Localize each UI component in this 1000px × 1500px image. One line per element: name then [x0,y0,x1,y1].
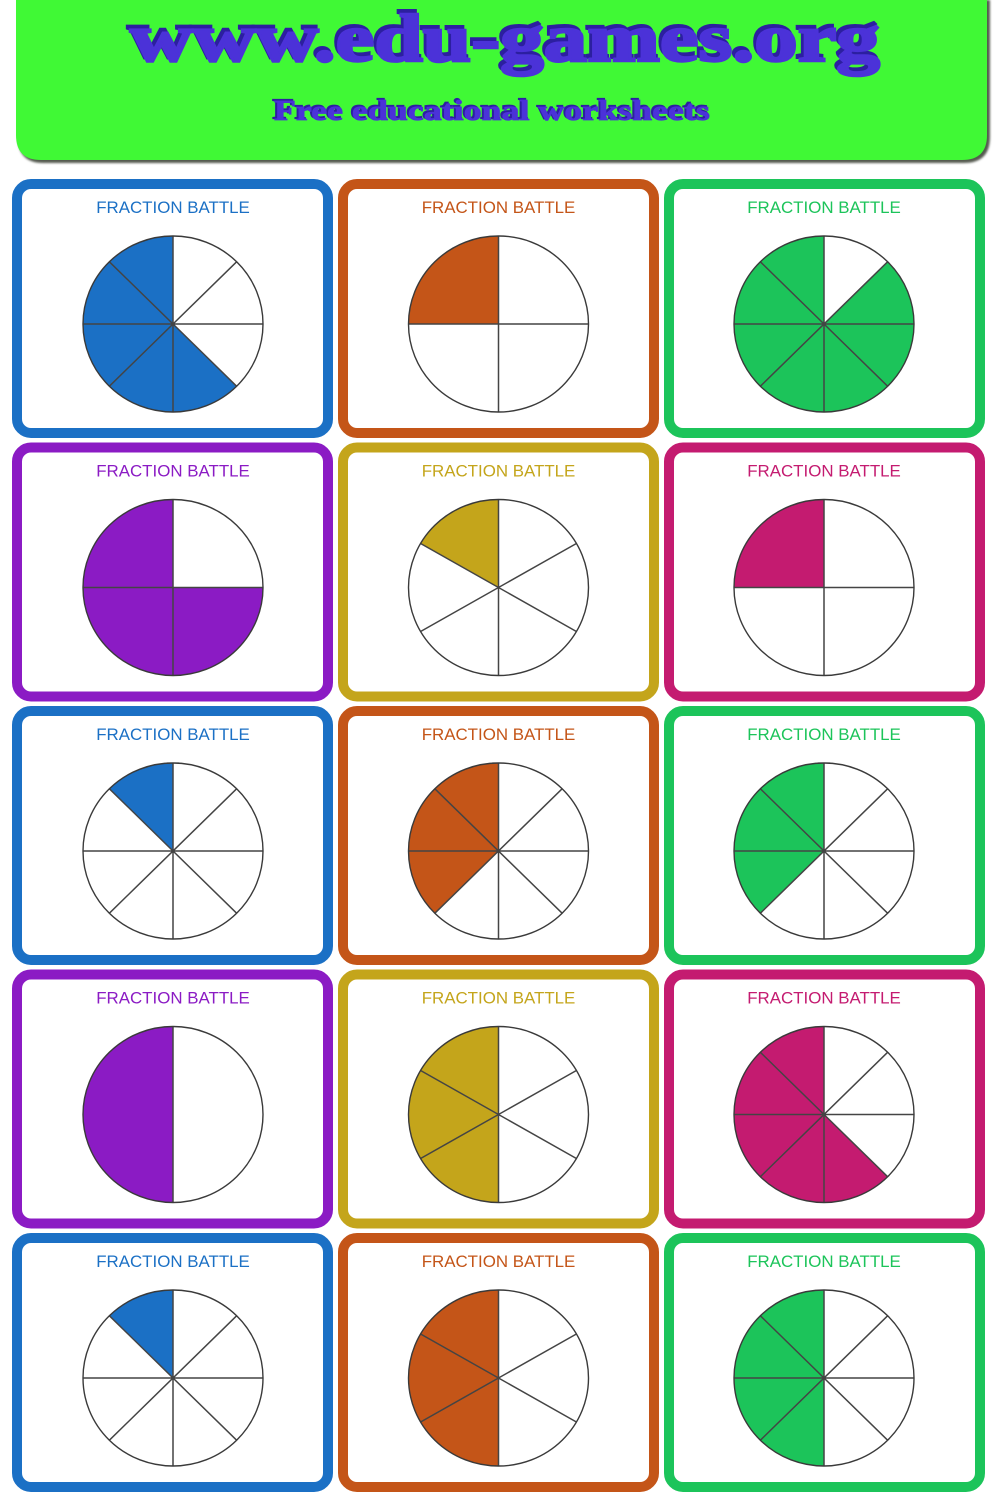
site title: www.edu-games.org [130,0,880,76]
subtitle: Free educational worksheets [272,94,708,125]
card: row 5 col 1, blue 1/8: FRACTION BATTLE [96,1252,250,1271]
pie chart: 5/8 [83,236,263,412]
card: row 4 col 2, gold 3/6: FRACTION BATTLE [422,988,575,1008]
card: row 4 col 3, magenta 5/8 [669,974,980,1224]
card: row 2 col 3, magenta 1/4: FRACTION BATTLE [747,462,901,480]
card: row 2 col 3, magenta 1/4 [669,448,980,696]
card: row 3 col 1, blue 1/8 [17,711,328,960]
pie chart: 1/6 [408,500,588,676]
card: row 2 col 2, gold 1/6: FRACTION BATTLE [422,462,575,480]
pie chart: 3/8 [408,763,588,939]
card: row 3 col 2, orange 3/8 [343,711,654,960]
card: row 2 col 2, gold 1/6 [343,448,654,696]
card: row 5 col 2, orange 3/6: FRACTION BATTLE [422,1252,575,1271]
card: row 1 col 3, green 7/8: FRACTION BATTLE [747,198,901,217]
pie chart: 3/6 [408,1290,588,1466]
pie chart: 4/8 [734,1290,914,1466]
card: row 1 col 3, green 7/8 [669,184,980,433]
pie chart: 3/6 [408,1026,588,1202]
pie chart: 1/8 [83,763,263,939]
pie chart: 3/8 [734,763,914,939]
card: row 4 col 1, purple 1/2 [17,974,328,1224]
card: row 2 col 1, purple 3/4 [17,448,328,696]
card: row 1 col 2, orange 1/4: FRACTION BATTLE [422,198,575,217]
card: row 5 col 2, orange 3/6 [343,1238,654,1487]
pie chart: 3/4 [83,500,263,676]
card: row 3 col 3, green 3/8 [669,711,980,960]
card: row 3 col 3, green 3/8: FRACTION BATTLE [747,725,901,744]
card: row 3 col 1, blue 1/8: FRACTION BATTLE [96,725,250,744]
card: row 4 col 3, magenta 5/8: FRACTION BATTLE [747,988,901,1008]
card: row 2 col 1, purple 3/4: FRACTION BATTLE [96,462,250,480]
pie chart: 1/4 [734,500,914,676]
card: row 5 col 1, blue 1/8 [17,1238,328,1487]
pie chart: 1/2 [83,1026,263,1202]
header banner [16,0,990,163]
card: row 3 col 2, orange 3/8: FRACTION BATTLE [422,725,575,744]
card: row 1 col 1, blue 5/8 [17,184,328,433]
card: row 4 col 2, gold 3/6 [343,974,654,1224]
card: row 1 col 2, orange 1/4 [343,184,654,433]
card: row 1 col 1, blue 5/8: FRACTION BATTLE [96,198,250,217]
pie chart: 1/8 [83,1290,263,1466]
pie chart: 1/4 [408,236,588,412]
card: row 4 col 1, purple 1/2: FRACTION BATTLE [96,988,250,1008]
card: row 5 col 3, green 4/8 [669,1238,980,1487]
pie chart: 7/8 [734,236,914,412]
card: row 5 col 3, green 4/8: FRACTION BATTLE [747,1252,901,1271]
pie chart: 5/8 [734,1026,914,1202]
subtitle: Free educational worksheets [274,96,710,127]
